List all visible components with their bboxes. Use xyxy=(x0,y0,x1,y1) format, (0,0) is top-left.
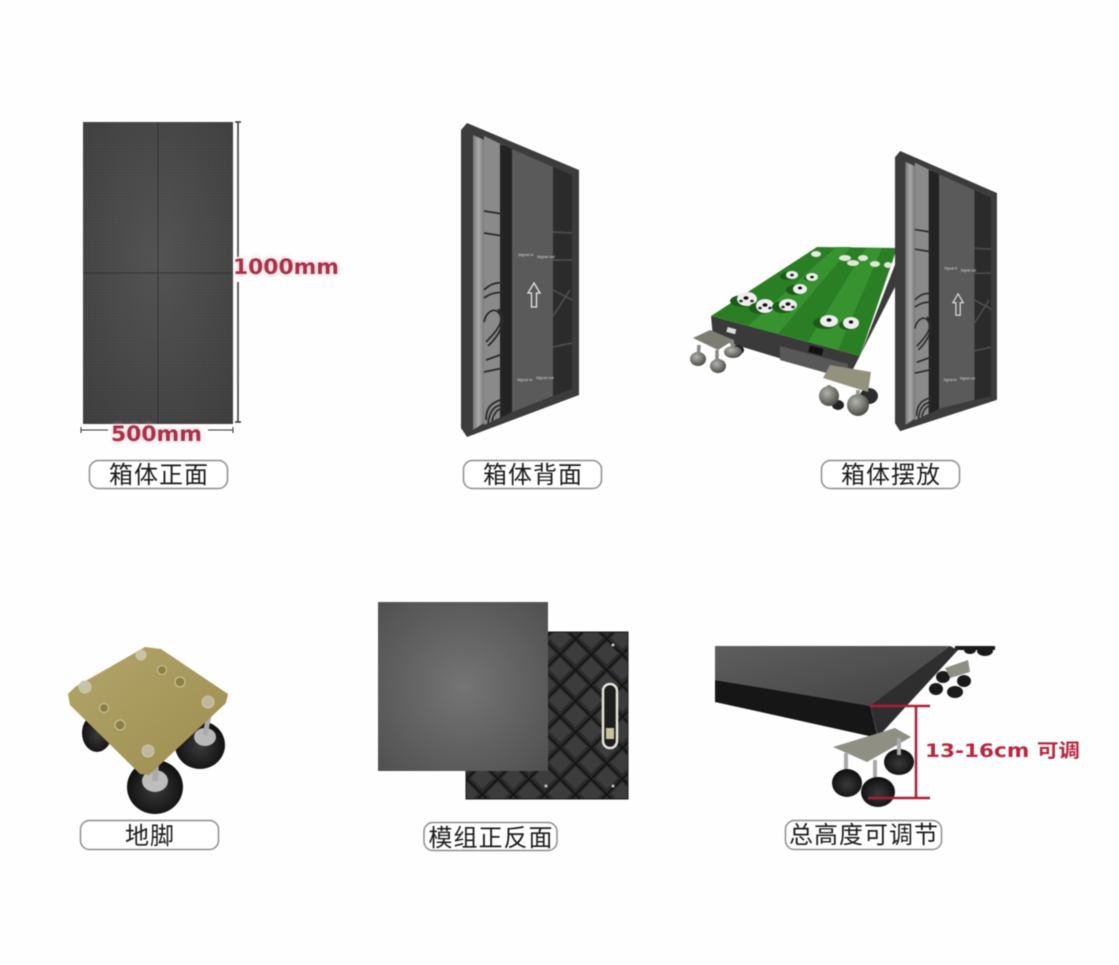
signal labels: Signal in xyxy=(518,252,533,257)
label: cabinet placement xyxy=(822,460,960,489)
panel: cabinet back xyxy=(461,123,602,489)
label: cabinet placement: 箱体摆放 xyxy=(841,462,941,489)
foot under slab xyxy=(832,728,914,807)
dark channel xyxy=(500,144,512,418)
upright cabinet back xyxy=(895,151,997,431)
width dimension line xyxy=(81,427,233,433)
upright cabinet back: Signal in xyxy=(944,267,958,271)
height dimension line xyxy=(235,122,241,422)
width dimension: 500mm: 500mm xyxy=(111,422,202,446)
upright cabinet back: Signal out xyxy=(960,376,975,380)
height note: 13-16cm 可调 xyxy=(925,740,1080,762)
label: adjustable total height: 总高度可调节 xyxy=(789,822,939,849)
label: cabinet back xyxy=(464,460,602,489)
panel: module front and back xyxy=(378,602,628,852)
LED cabinet front face xyxy=(83,122,233,424)
upright cabinet back: Signal out xyxy=(961,268,976,272)
panel: cabinet placement xyxy=(690,151,997,489)
cabinet side xyxy=(711,262,896,379)
plate bolts xyxy=(79,650,214,757)
red height bracket xyxy=(868,706,930,798)
centre plate xyxy=(512,149,553,412)
side rail xyxy=(473,135,484,430)
rubber pads xyxy=(82,714,225,814)
gold plate xyxy=(68,647,228,775)
cabinet slab xyxy=(715,646,958,738)
upright cabinet back: Signal in xyxy=(943,378,957,382)
height dimension: 1000mm: 1000mm xyxy=(233,255,339,279)
panel: foot xyxy=(68,647,228,850)
cabinet back frame xyxy=(461,123,579,437)
floor feet: right xyxy=(819,365,878,416)
module handle xyxy=(603,684,617,748)
signal labels: Signal out xyxy=(536,375,555,380)
module front xyxy=(378,602,548,771)
icon: up arrow xyxy=(528,283,540,307)
cables and brackets xyxy=(484,211,572,423)
label: foot: 地脚 xyxy=(125,823,175,850)
panel: height adjustment xyxy=(715,646,1080,850)
green screen xyxy=(711,247,897,356)
footballs xyxy=(730,251,892,330)
module back xyxy=(466,632,628,799)
label: foot xyxy=(80,820,218,850)
signal labels xyxy=(517,252,556,382)
left bay xyxy=(484,136,503,425)
panel: cabinet front xyxy=(81,122,339,489)
floor feet: left xyxy=(690,330,744,373)
floor cabinet xyxy=(711,247,897,379)
signal labels: Signal out xyxy=(537,254,556,259)
label: cabinet front xyxy=(90,460,228,489)
right channel xyxy=(553,167,572,396)
label: cabinet back: 箱体背面 xyxy=(483,462,583,489)
distant feet xyxy=(929,646,995,698)
label: module front and back: 模组正反面 xyxy=(428,825,554,852)
label: cabinet front: 箱体正面 xyxy=(109,462,209,489)
signal labels: Signal in xyxy=(517,377,532,382)
